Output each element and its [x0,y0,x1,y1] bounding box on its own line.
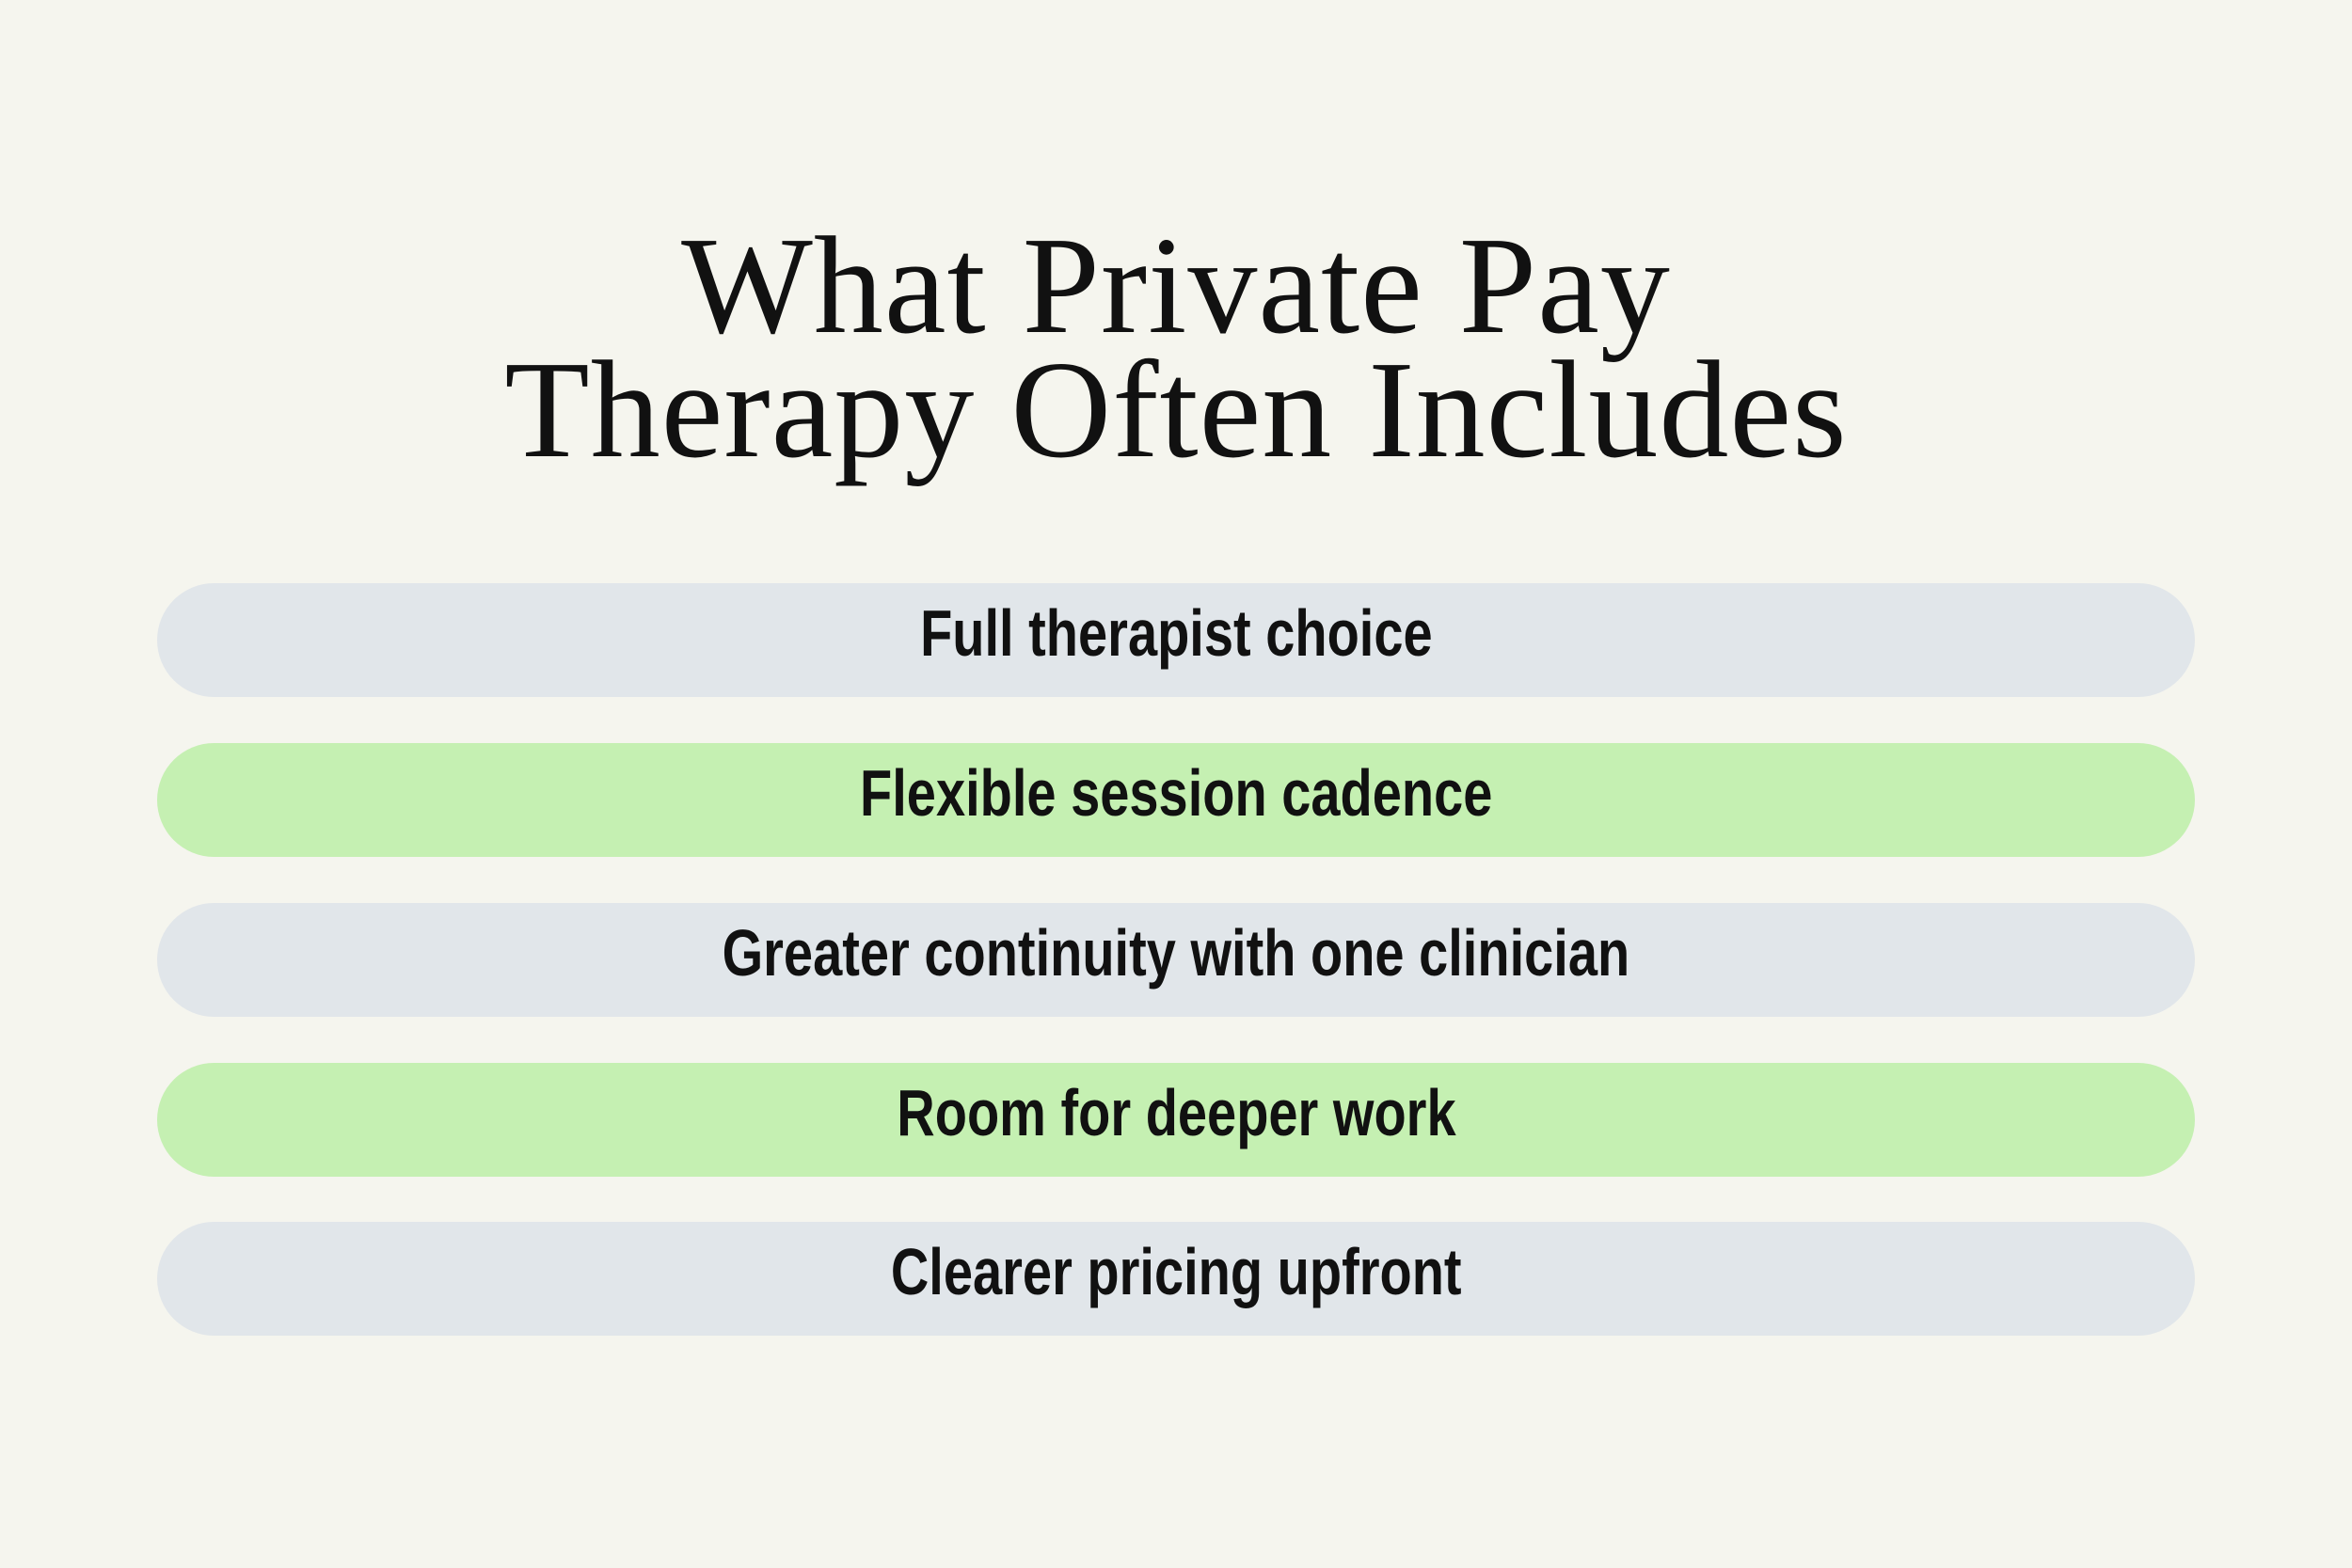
title: What Private Pay [681,209,1671,363]
pill: flexible session cadence [157,743,2195,857]
title: Therapy Often Includes [504,333,1848,487]
pill: greater continuity [157,903,2195,1017]
pill: room for deeper work: Room for deeper work [897,1076,1455,1149]
title [504,209,1848,487]
pill: clearer pricing: Clearer pricing upfront [891,1234,1461,1307]
pill: full therapist choice: Full therapist choice [920,596,1432,670]
pill: clearer pricing [157,1222,2195,1336]
pill: greater continuity: Greater continuity with one clinician [723,916,1629,990]
pill: flexible session cadence: Flexible session cadence [860,756,1492,830]
pill: full therapist choice [157,583,2195,697]
pill: room for deeper work [157,1063,2195,1177]
